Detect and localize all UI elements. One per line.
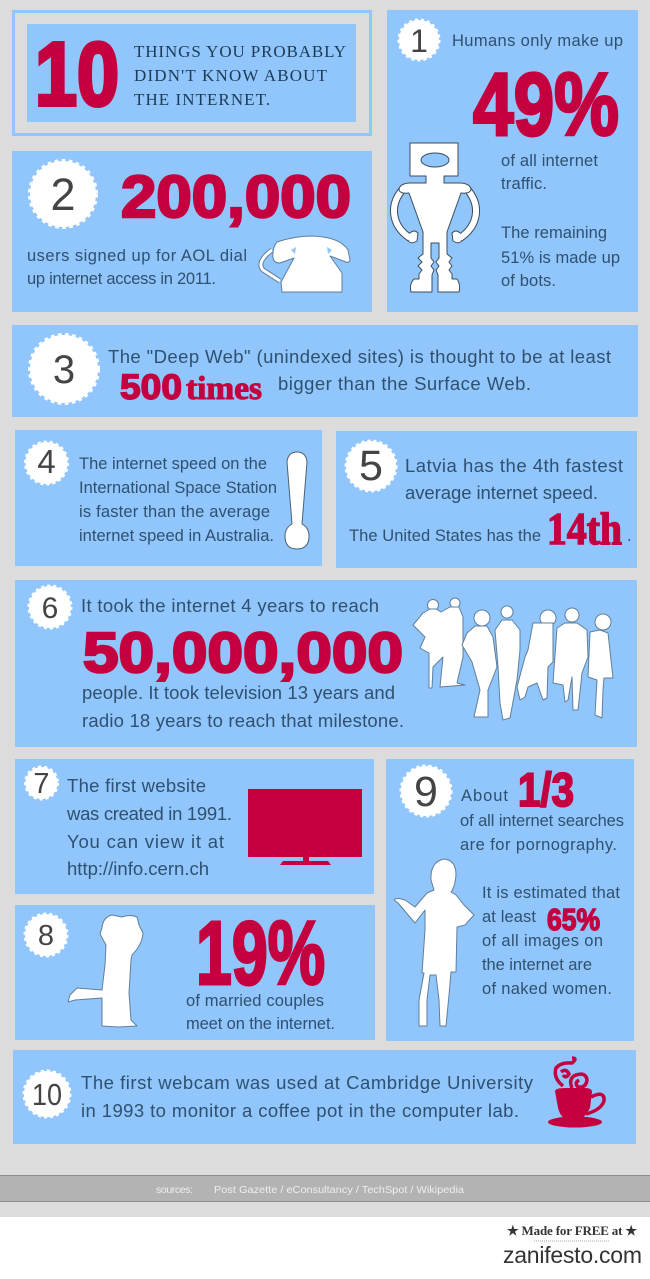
fact 5 text: average internet speed.: [405, 482, 598, 503]
title text: THE INTERNET.: [134, 90, 270, 109]
panel: fact 1: [387, 10, 638, 312]
fact 4 text: internet speed in Australia.: [79, 527, 274, 545]
icon: monitor: [248, 789, 362, 865]
fact 7 text: was created in 1991.: [66, 803, 232, 824]
badge 4: [26, 442, 68, 484]
icon: coffee cup: [548, 1058, 604, 1128]
title text: [134, 42, 346, 109]
fact 2 text: up internet access in 2011.: [27, 270, 216, 288]
panel: fact 7: [15, 759, 374, 894]
fact 9 text: of all internet searches: [460, 812, 624, 830]
icon: crowd of people: [413, 598, 613, 720]
badge 1: [399, 20, 439, 60]
icon: robot: [394, 143, 476, 292]
icon: exclamation mark: [285, 452, 309, 549]
fact 4 text: is faster than the average: [79, 503, 270, 521]
badge 10: 10: [32, 1077, 62, 1112]
title number 10: 10: [35, 25, 119, 125]
fact 4 text: The internet speed on the: [79, 455, 267, 473]
fact 2 text: users signed up for AOL dial: [27, 247, 247, 265]
fact 9 text: of all images on: [482, 932, 603, 950]
badge 1: 1: [410, 23, 428, 59]
fact 7 text: The first website: [67, 775, 206, 796]
fact 1 text: [501, 152, 620, 290]
panel: fact 2: [12, 151, 372, 312]
panel: fact 3: [12, 325, 638, 417]
fact 5 text: The United States has the: [349, 527, 541, 545]
fact 6 text: [82, 682, 404, 731]
fact 6 text: people. It took television 13 years and: [82, 682, 395, 703]
sources bar: [0, 1175, 650, 1202]
fact 6 intro: It took the internet 4 years to reach: [81, 595, 379, 616]
panel: fact 8: [15, 904, 375, 1040]
fact 1 text: The remaining: [501, 224, 607, 242]
badge 2: 2: [50, 169, 76, 220]
icon: woman: [394, 859, 474, 1026]
stat 200,000: 200,000: [121, 164, 351, 230]
fact 1 text: 51% is made up: [501, 249, 620, 267]
panel: fact 10: [13, 1050, 636, 1144]
badge 2: [30, 161, 96, 227]
badge 4: 4: [37, 443, 56, 480]
fact 6 text: radio 18 years to reach that milestone.: [82, 710, 404, 731]
badge 7: [26, 767, 58, 800]
fact 10 text: [81, 1072, 534, 1121]
fact 5 text: Latvia has the 4th fastest: [405, 455, 623, 476]
stat 14th: 14th: [547, 503, 622, 554]
badge 5: [346, 441, 396, 491]
fact 1 text: of all internet: [501, 152, 598, 170]
fact 8 text: meet on the internet.: [186, 1015, 335, 1033]
footer: zanifesto credit: [0, 1217, 650, 1279]
fact 7 text: http://info.cern.ch: [67, 858, 209, 879]
panel: fact 5: [336, 431, 637, 568]
sources list: Post Gazette / eConsultancy / TechSpot / Wikipedia: [214, 1184, 464, 1196]
stat 1/3: 1/3: [518, 763, 574, 816]
badge 3: 3: [53, 348, 75, 392]
fact 2 text: [27, 247, 247, 288]
icon: couple: [68, 915, 143, 1027]
stat 65%: 65%: [547, 902, 600, 937]
fact 9 intro: About: [461, 787, 508, 805]
title text: THINGS YOU PROBABLY: [134, 42, 346, 61]
fact 1 text: traffic.: [501, 175, 547, 193]
stat 50,000,000: 50,000,000: [83, 621, 403, 685]
fact 4 text: [79, 455, 277, 545]
stat 19%: 19%: [196, 904, 325, 1004]
fact 8 text: of married couples: [186, 992, 324, 1010]
fact 9 text: the internet are: [482, 956, 592, 974]
fact 5 text: .: [627, 527, 632, 545]
badge 9: 9: [414, 768, 438, 816]
fact 9 text: of naked women.: [482, 980, 612, 998]
stat 500 times: [120, 368, 262, 407]
fact 9 text: at least: [482, 908, 536, 926]
badge 8: 8: [38, 920, 54, 952]
fact 3 text: The "Deep Web" (unindexed sites) is thought to be at least: [108, 346, 611, 367]
icon: telephone: [261, 236, 350, 292]
panel: fact 6: [15, 580, 637, 747]
badge 6: 6: [42, 592, 58, 625]
badge 6: [29, 586, 71, 628]
made for free line: ★ Made for FREE at ★: [507, 1223, 637, 1238]
stat 49%: 49%: [473, 54, 619, 154]
fact 1 intro: Humans only make up: [452, 32, 623, 50]
sources label: sources:: [156, 1184, 193, 1196]
fact 9 text: It is estimated that: [482, 884, 620, 902]
badge 8: [25, 914, 67, 956]
fact 5 text: [349, 455, 632, 545]
badge 3: [30, 335, 98, 403]
title text: DIDN'T KNOW ABOUT: [134, 66, 328, 85]
fact 9 text: are for pornography.: [460, 836, 617, 854]
fact 9 text: [460, 812, 624, 998]
panel: fact 4: [15, 430, 322, 566]
stat 500 times: 500: [120, 368, 182, 407]
fact 8 text: [186, 992, 335, 1033]
zanifesto logo text: zanifesto.com: [503, 1242, 642, 1268]
badge 9: [401, 766, 451, 816]
badge 5: 5: [359, 442, 383, 490]
fact 10 text: The first webcam was used at Cambridge University: [81, 1072, 534, 1093]
fact 1 text: of bots.: [501, 272, 556, 290]
panel: title: [14, 12, 370, 134]
fact 10 text: in 1993 to monitor a coffee pot in the computer lab.: [81, 1100, 519, 1121]
badge 7: 7: [33, 768, 50, 800]
fact 3 text end: bigger than the Surface Web.: [278, 373, 531, 394]
fact 4 text: International Space Station: [79, 479, 277, 497]
fact 7 text: You can view it at: [67, 831, 224, 852]
stat 500 times: times: [186, 371, 262, 407]
panel: fact 9: [386, 759, 634, 1041]
badge 10: [24, 1071, 70, 1117]
fact 7 text: [66, 775, 232, 879]
